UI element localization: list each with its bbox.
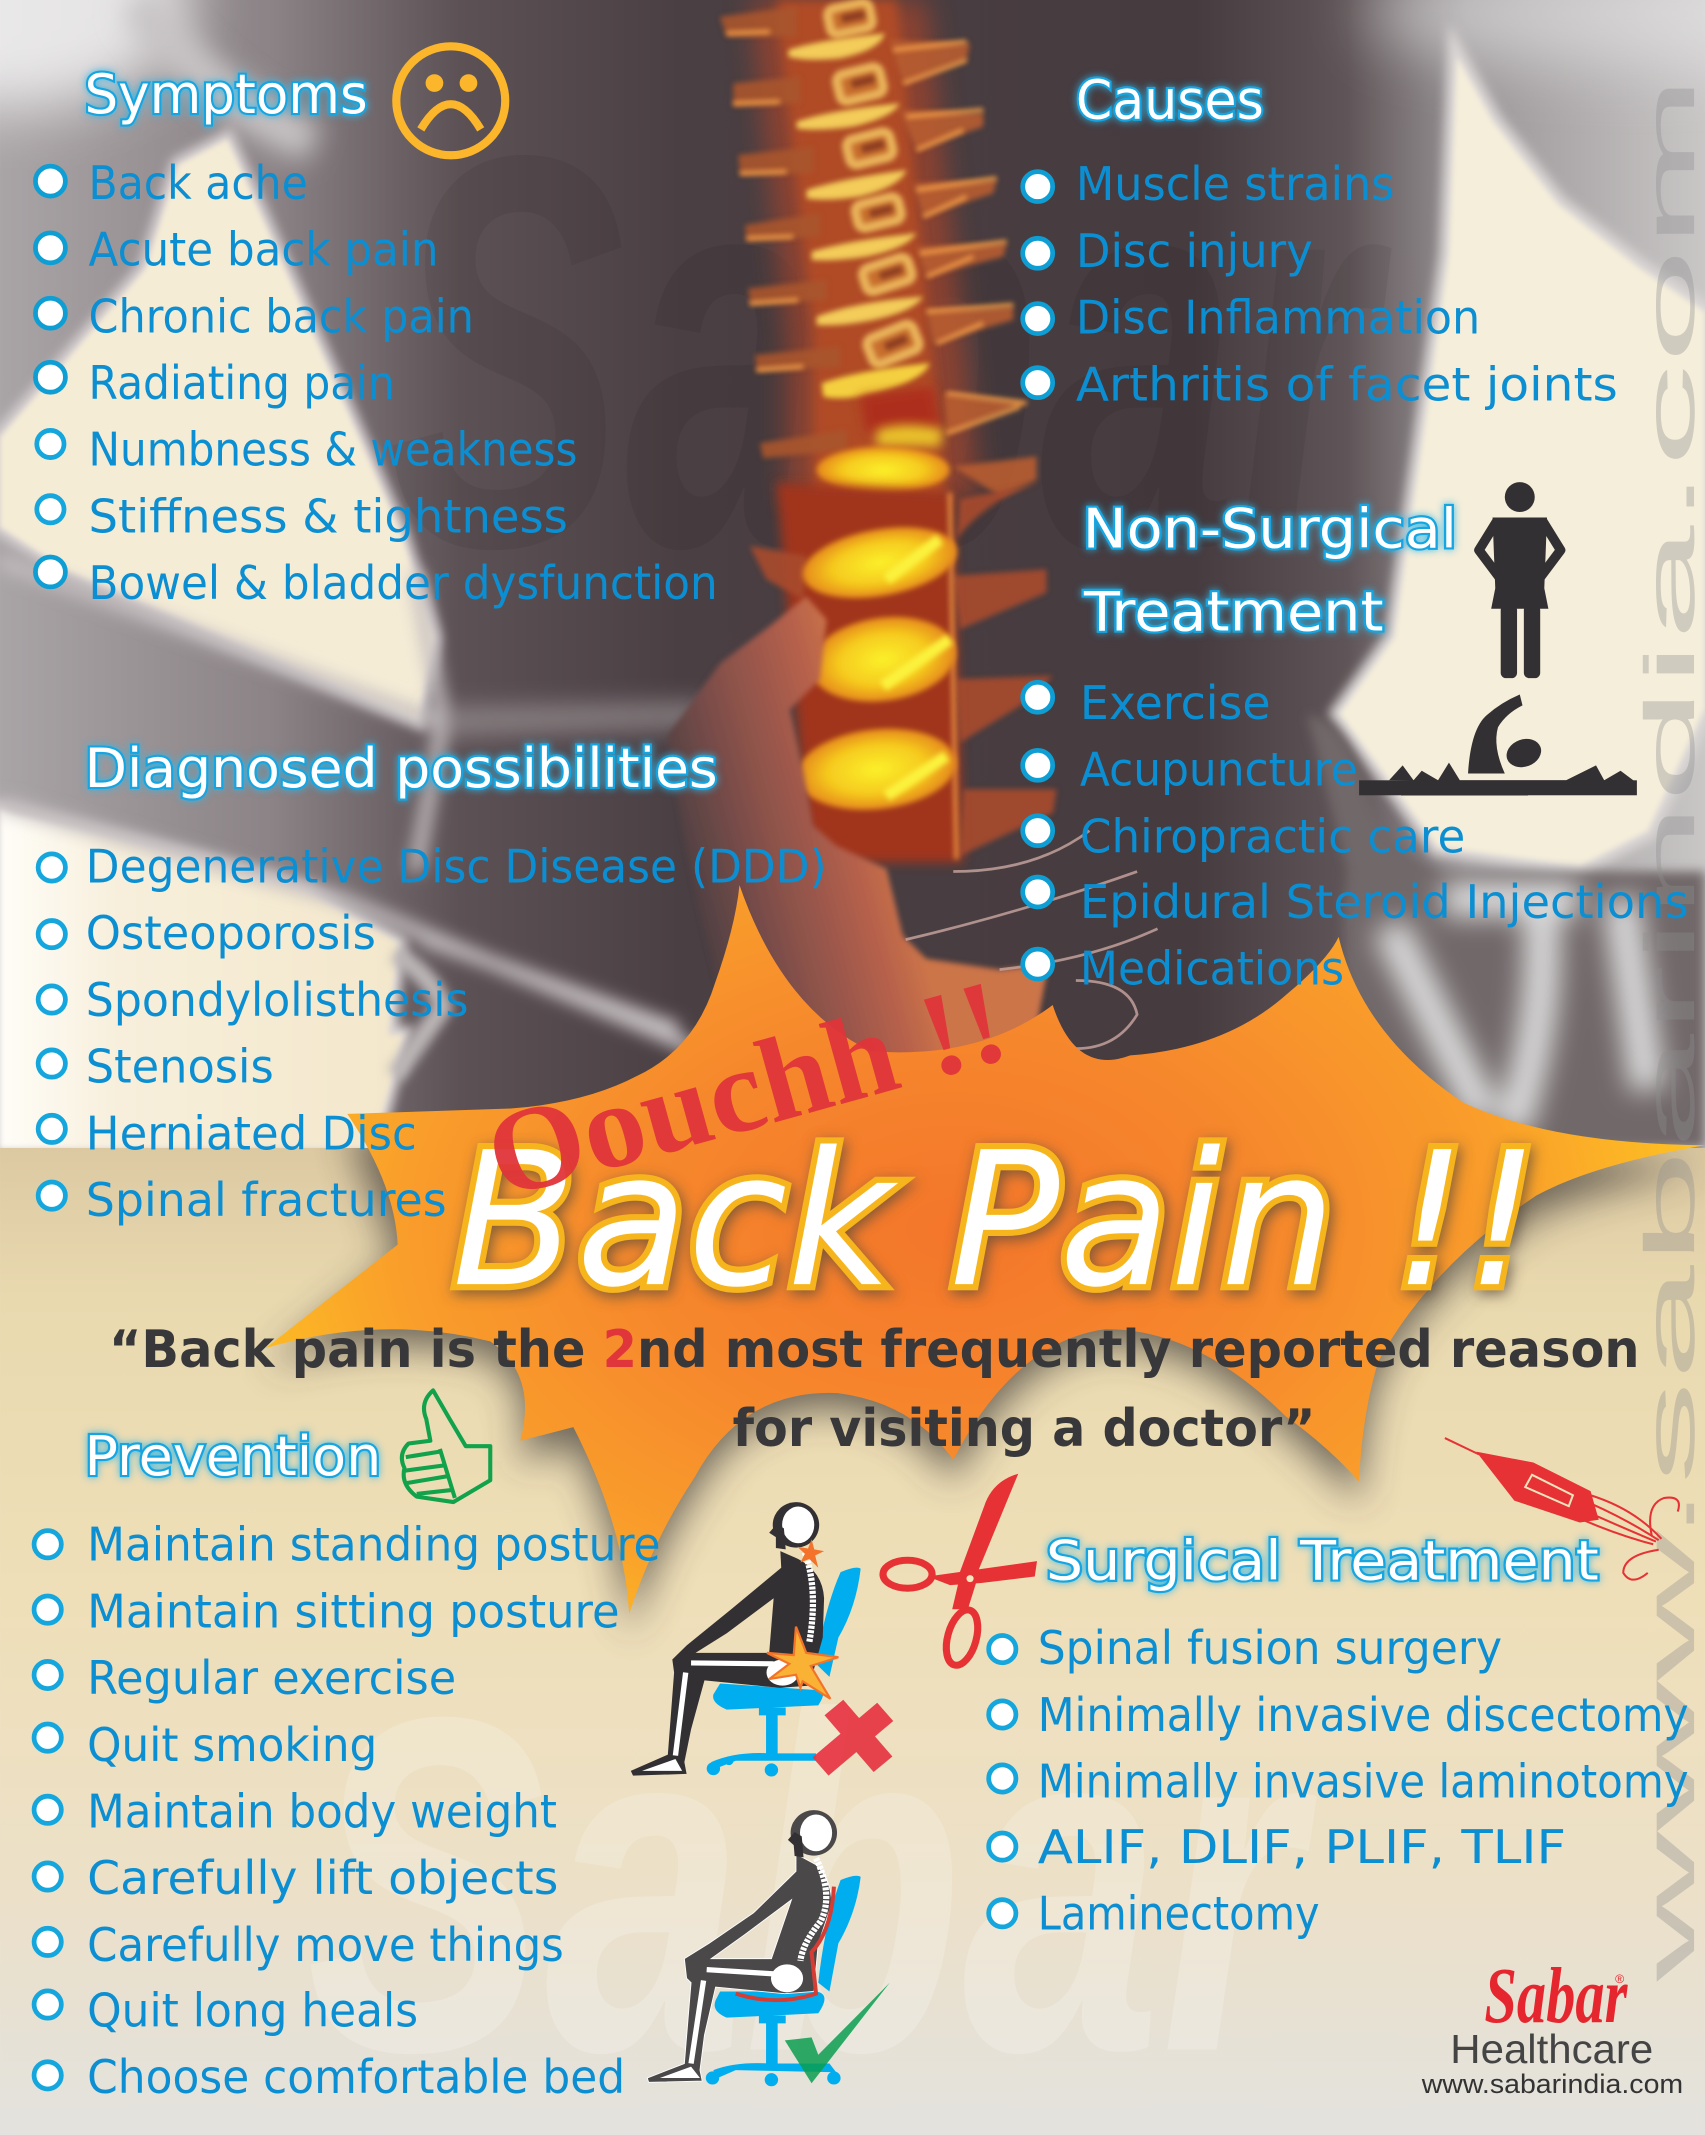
icon: surgical tool xyxy=(1445,1438,1679,1580)
prevention list: Quit long heals xyxy=(87,1983,418,2037)
starburst shadow xyxy=(266,1130,1705,1637)
icon: scissors xyxy=(883,1474,1037,1669)
causes list xyxy=(1023,157,1618,411)
diagnosed list: Spondylolisthesis xyxy=(86,973,468,1027)
body silhouette xyxy=(631,1551,824,1776)
logo: Sabar Healthcare xyxy=(1421,1953,1683,2099)
panel: causes xyxy=(1023,67,1618,411)
non-surgical list: Medications xyxy=(1080,942,1344,996)
non-surgical list xyxy=(1023,676,1689,996)
chair xyxy=(706,1876,861,2086)
symptoms list: Stiffness & tightness xyxy=(89,489,568,543)
quote xyxy=(109,1320,1640,1459)
lower spine discs xyxy=(750,483,1056,863)
chair xyxy=(707,1568,861,1777)
heading: non-surgical treatment: Non-Surgical xyxy=(1083,496,1457,560)
symptoms list: Back ache xyxy=(89,156,308,210)
illustration: good sitting posture xyxy=(647,1810,890,2086)
icon: thumbs up xyxy=(402,1390,490,1502)
panel: non-surgical treatment xyxy=(1023,482,1689,996)
panel: surgical treatment xyxy=(989,1529,1689,1941)
diagnosed list xyxy=(38,839,827,1227)
icon: swimmer xyxy=(1359,695,1637,795)
panel: prevention xyxy=(34,1390,660,2104)
exclamation: Oouchh: Oouchh !! xyxy=(473,953,1020,1223)
skull xyxy=(773,1502,819,1548)
logo: Sabar Healthcare: www.sabarindia.com xyxy=(1421,2068,1683,2099)
hand on lower back xyxy=(667,596,1049,1076)
skeleton xyxy=(805,1552,813,1642)
non-surgical list: Exercise xyxy=(1080,676,1271,730)
lower background xyxy=(0,1148,1705,2135)
causes list: Disc injury xyxy=(1076,224,1313,278)
heading: prevention: Prevention xyxy=(84,1424,381,1488)
icon: standing person xyxy=(1479,482,1561,678)
heading: symptoms: Symptoms xyxy=(84,62,368,126)
logo: Sabar Healthcare: Sabar xyxy=(1484,1953,1628,2040)
heading: non-surgical treatment xyxy=(1083,496,1457,644)
symptoms list: Numbness & weakness xyxy=(89,423,577,477)
diagnosed list: Degenerative Disc Disease (DDD) xyxy=(86,839,827,893)
panel: symptoms xyxy=(35,46,718,610)
causes list: Arthritis of facet joints xyxy=(1076,357,1618,411)
prevention list: Regular exercise xyxy=(87,1651,456,1705)
body silhouette xyxy=(647,1854,832,2082)
prevention list: Carefully move things xyxy=(87,1918,564,1972)
green check xyxy=(785,1983,890,2083)
surgical list: Spinal fusion surgery xyxy=(1038,1621,1502,1675)
non-surgical list: Acupuncture xyxy=(1080,743,1358,797)
title: Back Pain: Back Pain !! xyxy=(452,1112,1539,1328)
causes list: Disc Inflammation xyxy=(1076,291,1480,345)
prevention list: Choose comfortable bed xyxy=(87,2050,625,2104)
prevention list: Maintain sitting posture xyxy=(87,1584,620,1638)
diagnosed list: Herniated Disc xyxy=(86,1106,417,1160)
surgical list: ALIF, DLIF, PLIF, TLIF xyxy=(1038,1820,1566,1874)
surgical list xyxy=(989,1621,1689,1941)
non-surgical list: Chiropractic care xyxy=(1080,809,1465,863)
skeleton xyxy=(800,1858,826,1961)
non-surgical list: Epidural Steroid Injections xyxy=(1080,875,1689,929)
prevention list: Maintain standing posture xyxy=(87,1518,660,1572)
quote: “Back pain is the 2nd most frequently reported reason xyxy=(109,1320,1640,1380)
prevention list: Carefully lift objects xyxy=(87,1851,558,1905)
heading: surgical treatment: Surgical Treatment xyxy=(1046,1529,1599,1593)
symptoms list: Radiating pain xyxy=(89,356,395,410)
starburst xyxy=(266,885,1705,1614)
heading: diagnosed possibilities: Diagnosed possibilities xyxy=(84,736,718,800)
surgical list: Laminectomy xyxy=(1038,1887,1320,1941)
skull xyxy=(791,1810,837,1856)
illustration: bad sitting posture xyxy=(631,1502,885,1777)
prevention list: Maintain body weight xyxy=(87,1785,557,1839)
diagnosed list: Osteoporosis xyxy=(86,906,376,960)
upper spine vertebrae xyxy=(720,0,1037,500)
prevention list xyxy=(34,1518,660,2104)
logo: Sabar Healthcare: Healthcare xyxy=(1450,2026,1653,2072)
symptoms list: Acute back pain xyxy=(89,223,439,277)
spine illustration xyxy=(667,0,1158,1076)
symptoms list xyxy=(35,156,718,610)
quote: for visiting a doctor” xyxy=(733,1399,1316,1459)
symptoms list: Chronic back pain xyxy=(89,289,474,343)
pain bursts xyxy=(797,1539,824,1568)
upper photo: torso and arms background xyxy=(0,0,1705,1148)
red cross xyxy=(821,1707,885,1766)
diagnosed list: Spinal fractures xyxy=(86,1173,447,1227)
symptoms list: Bowel & bladder dysfunction xyxy=(89,556,718,610)
diagnosed list: Stenosis xyxy=(86,1040,274,1094)
prevention list: Quit smoking xyxy=(87,1718,377,1772)
logo: Sabar Healthcare: ® xyxy=(1615,1972,1624,1986)
heading: non-surgical treatment: Treatment xyxy=(1083,580,1384,644)
heading: causes: Causes xyxy=(1076,67,1264,131)
causes list: Muscle strains xyxy=(1076,157,1394,211)
lumbar support xyxy=(736,1887,834,2000)
icon: sad face xyxy=(396,46,505,155)
panel: diagnosed possibilities xyxy=(38,736,827,1227)
